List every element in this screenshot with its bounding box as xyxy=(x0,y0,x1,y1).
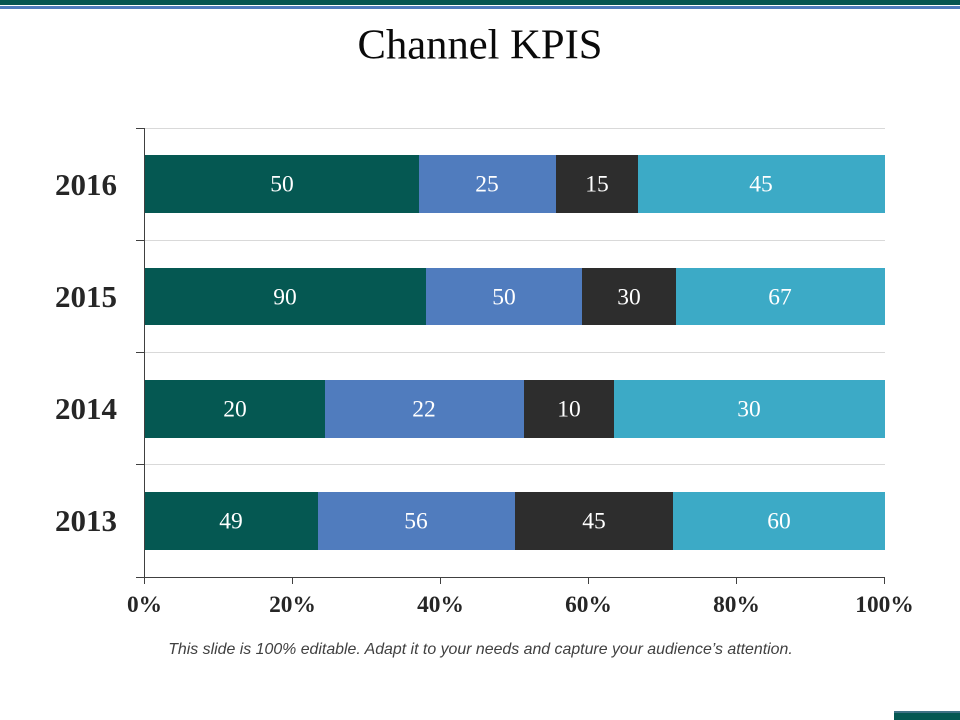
percentage axis labels: 100% xyxy=(855,592,914,618)
year axis labels: 2016 xyxy=(55,167,117,202)
bar: 2015: 90 xyxy=(273,284,297,310)
bar: 2013: 45 xyxy=(582,508,606,534)
bottom right corner accent xyxy=(894,711,960,720)
percentage axis labels: 40% xyxy=(417,592,464,618)
year axis labels: 2013 xyxy=(55,503,117,538)
percentage axis labels: 20% xyxy=(269,592,316,618)
bar: 2014: 20 xyxy=(223,396,247,422)
bar: 2014: 22 xyxy=(412,396,436,422)
bar: 2016 xyxy=(144,155,885,213)
top banner stripes xyxy=(0,0,960,9)
bar: 2013: 49 xyxy=(219,508,243,534)
bar: 2013 xyxy=(144,492,885,550)
title: Channel KPIS xyxy=(358,22,602,68)
axes and tick marks xyxy=(136,128,884,584)
stacked bar chart xyxy=(55,128,914,618)
bar: 2016: 50 xyxy=(270,172,294,198)
bar: 2014: 30 xyxy=(737,396,761,422)
bar: 2015: 50 xyxy=(492,284,516,310)
year axis labels: 2014 xyxy=(55,391,117,426)
bar: 2016: 45 xyxy=(749,172,773,198)
bar: 2013: 56 xyxy=(404,508,428,534)
footnote: This slide is 100% editable. Adapt it to your needs and capture your audience’s attention. xyxy=(168,641,793,658)
bar: 2016: 25 xyxy=(475,172,499,198)
bar: 2016: 15 xyxy=(585,172,609,198)
year axis labels: 2015 xyxy=(55,279,117,314)
percentage axis labels xyxy=(127,592,914,618)
percentage axis labels: 60% xyxy=(565,592,612,618)
year axis labels xyxy=(55,167,117,538)
bar: 2015 xyxy=(144,268,885,325)
bar: 2014 xyxy=(144,380,885,438)
percentage axis labels: 0% xyxy=(127,592,162,618)
bar: 2015: 30 xyxy=(617,284,641,310)
percentage axis labels: 80% xyxy=(713,592,760,618)
bar: 2014: 10 xyxy=(557,396,581,422)
bar: 2015: 67 xyxy=(768,284,792,310)
bar: 2013: 60 xyxy=(767,508,791,534)
